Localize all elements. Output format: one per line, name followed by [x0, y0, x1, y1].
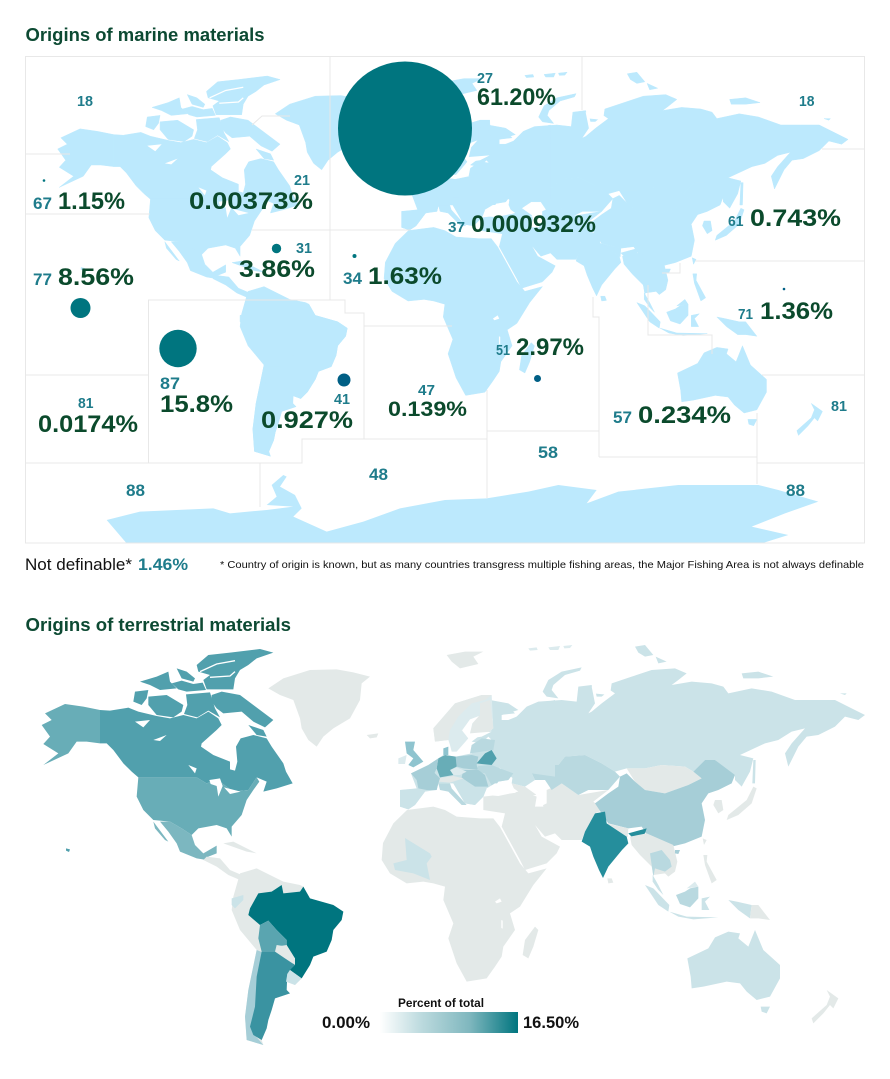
map: world choropleth [42, 645, 865, 1045]
labels: fishing area numbers: 41 [334, 392, 350, 408]
legend: percent of total [322, 996, 579, 1033]
labels: fishing area numbers: 67 [33, 195, 52, 213]
labels: fishing area numbers: 87 [160, 375, 180, 393]
region: Asia [447, 645, 865, 878]
labels: percent values: 61.20% [477, 84, 556, 111]
labels: fishing area numbers: 31 [296, 241, 312, 257]
labels: percent values: 15.8% [160, 391, 233, 418]
heading: marine: Origins of marine materials [26, 25, 264, 45]
labels: fishing area numbers: 47 [418, 383, 435, 399]
labels: percent values: 0.0174% [38, 411, 138, 438]
labels: percent values: 0.743% [750, 205, 841, 232]
panel: origins of terrestrial materials [26, 615, 865, 1045]
region: South America and Africa [232, 807, 547, 1045]
labels: percent values: 1.36% [760, 298, 833, 325]
labels: fishing area numbers: 81 [831, 399, 847, 415]
labels: fishing area numbers: 77 [33, 271, 52, 289]
map: Antarctica [107, 475, 818, 543]
labels: fishing area numbers: 48 [369, 466, 388, 484]
labels: percent values: 0.139% [388, 398, 467, 421]
labels: percent values: 2.97% [516, 334, 584, 361]
labels: fishing area numbers: 21 [294, 173, 310, 189]
legend: percent of total: 0.00% [322, 1014, 370, 1032]
region: North America [42, 649, 378, 880]
labels: fishing area numbers: 34 [343, 270, 363, 288]
labels: fishing area numbers: 81 [78, 396, 94, 412]
legend: percent of total: 16.50% [523, 1014, 579, 1032]
panel: origins of marine materials [25, 25, 865, 574]
labels: fishing area numbers: 27 [477, 71, 493, 87]
labels: fishing area numbers: 88 [786, 482, 805, 500]
label: not definable: Not definable* [25, 555, 132, 574]
legend: percent of total: Percent of total [398, 996, 484, 1010]
label: not definable: 1.46% [138, 555, 188, 574]
labels: fishing area numbers: 58 [538, 444, 558, 462]
region: Oceania [687, 930, 838, 1023]
map: fishing area grid [25, 56, 865, 543]
region: Europe [398, 695, 555, 809]
labels: percent values: 0.000932% [471, 211, 596, 238]
bubbles: share by fishing area [43, 62, 785, 386]
labels: percent values: 0.927% [261, 407, 353, 434]
labels: fishing area numbers: 61 [728, 214, 744, 230]
labels: percent values: 8.56% [58, 264, 134, 291]
labels: percent values: 0.234% [638, 402, 731, 429]
heading: terrestrial: Origins of terrestrial materials [26, 615, 291, 635]
labels: percent values: 3.86% [239, 256, 315, 283]
labels: fishing area numbers: 57 [613, 409, 632, 427]
labels: fishing area numbers: 37 [448, 220, 465, 236]
labels: percent values: 1.63% [368, 263, 442, 290]
label: not definable [25, 555, 188, 574]
footnote: * Country of origin is known, but as many countries transgress multiple fishing areas, the Major Fishing Area is not always definable [220, 559, 864, 571]
labels: percent values [38, 84, 841, 438]
labels: percent values: 1.15% [58, 188, 125, 215]
labels: fishing area numbers: 51 [496, 343, 510, 359]
labels: fishing area numbers: 88 [126, 482, 145, 500]
labels: fishing area numbers: 18 [799, 94, 814, 110]
labels: fishing area numbers [33, 71, 847, 500]
labels: fishing area numbers: 18 [77, 94, 93, 110]
region: Southeast Asia [607, 833, 770, 920]
labels: fishing area numbers: 71 [738, 307, 753, 323]
labels: percent values: 0.00373% [189, 188, 313, 215]
map: marine base land [58, 72, 848, 456]
